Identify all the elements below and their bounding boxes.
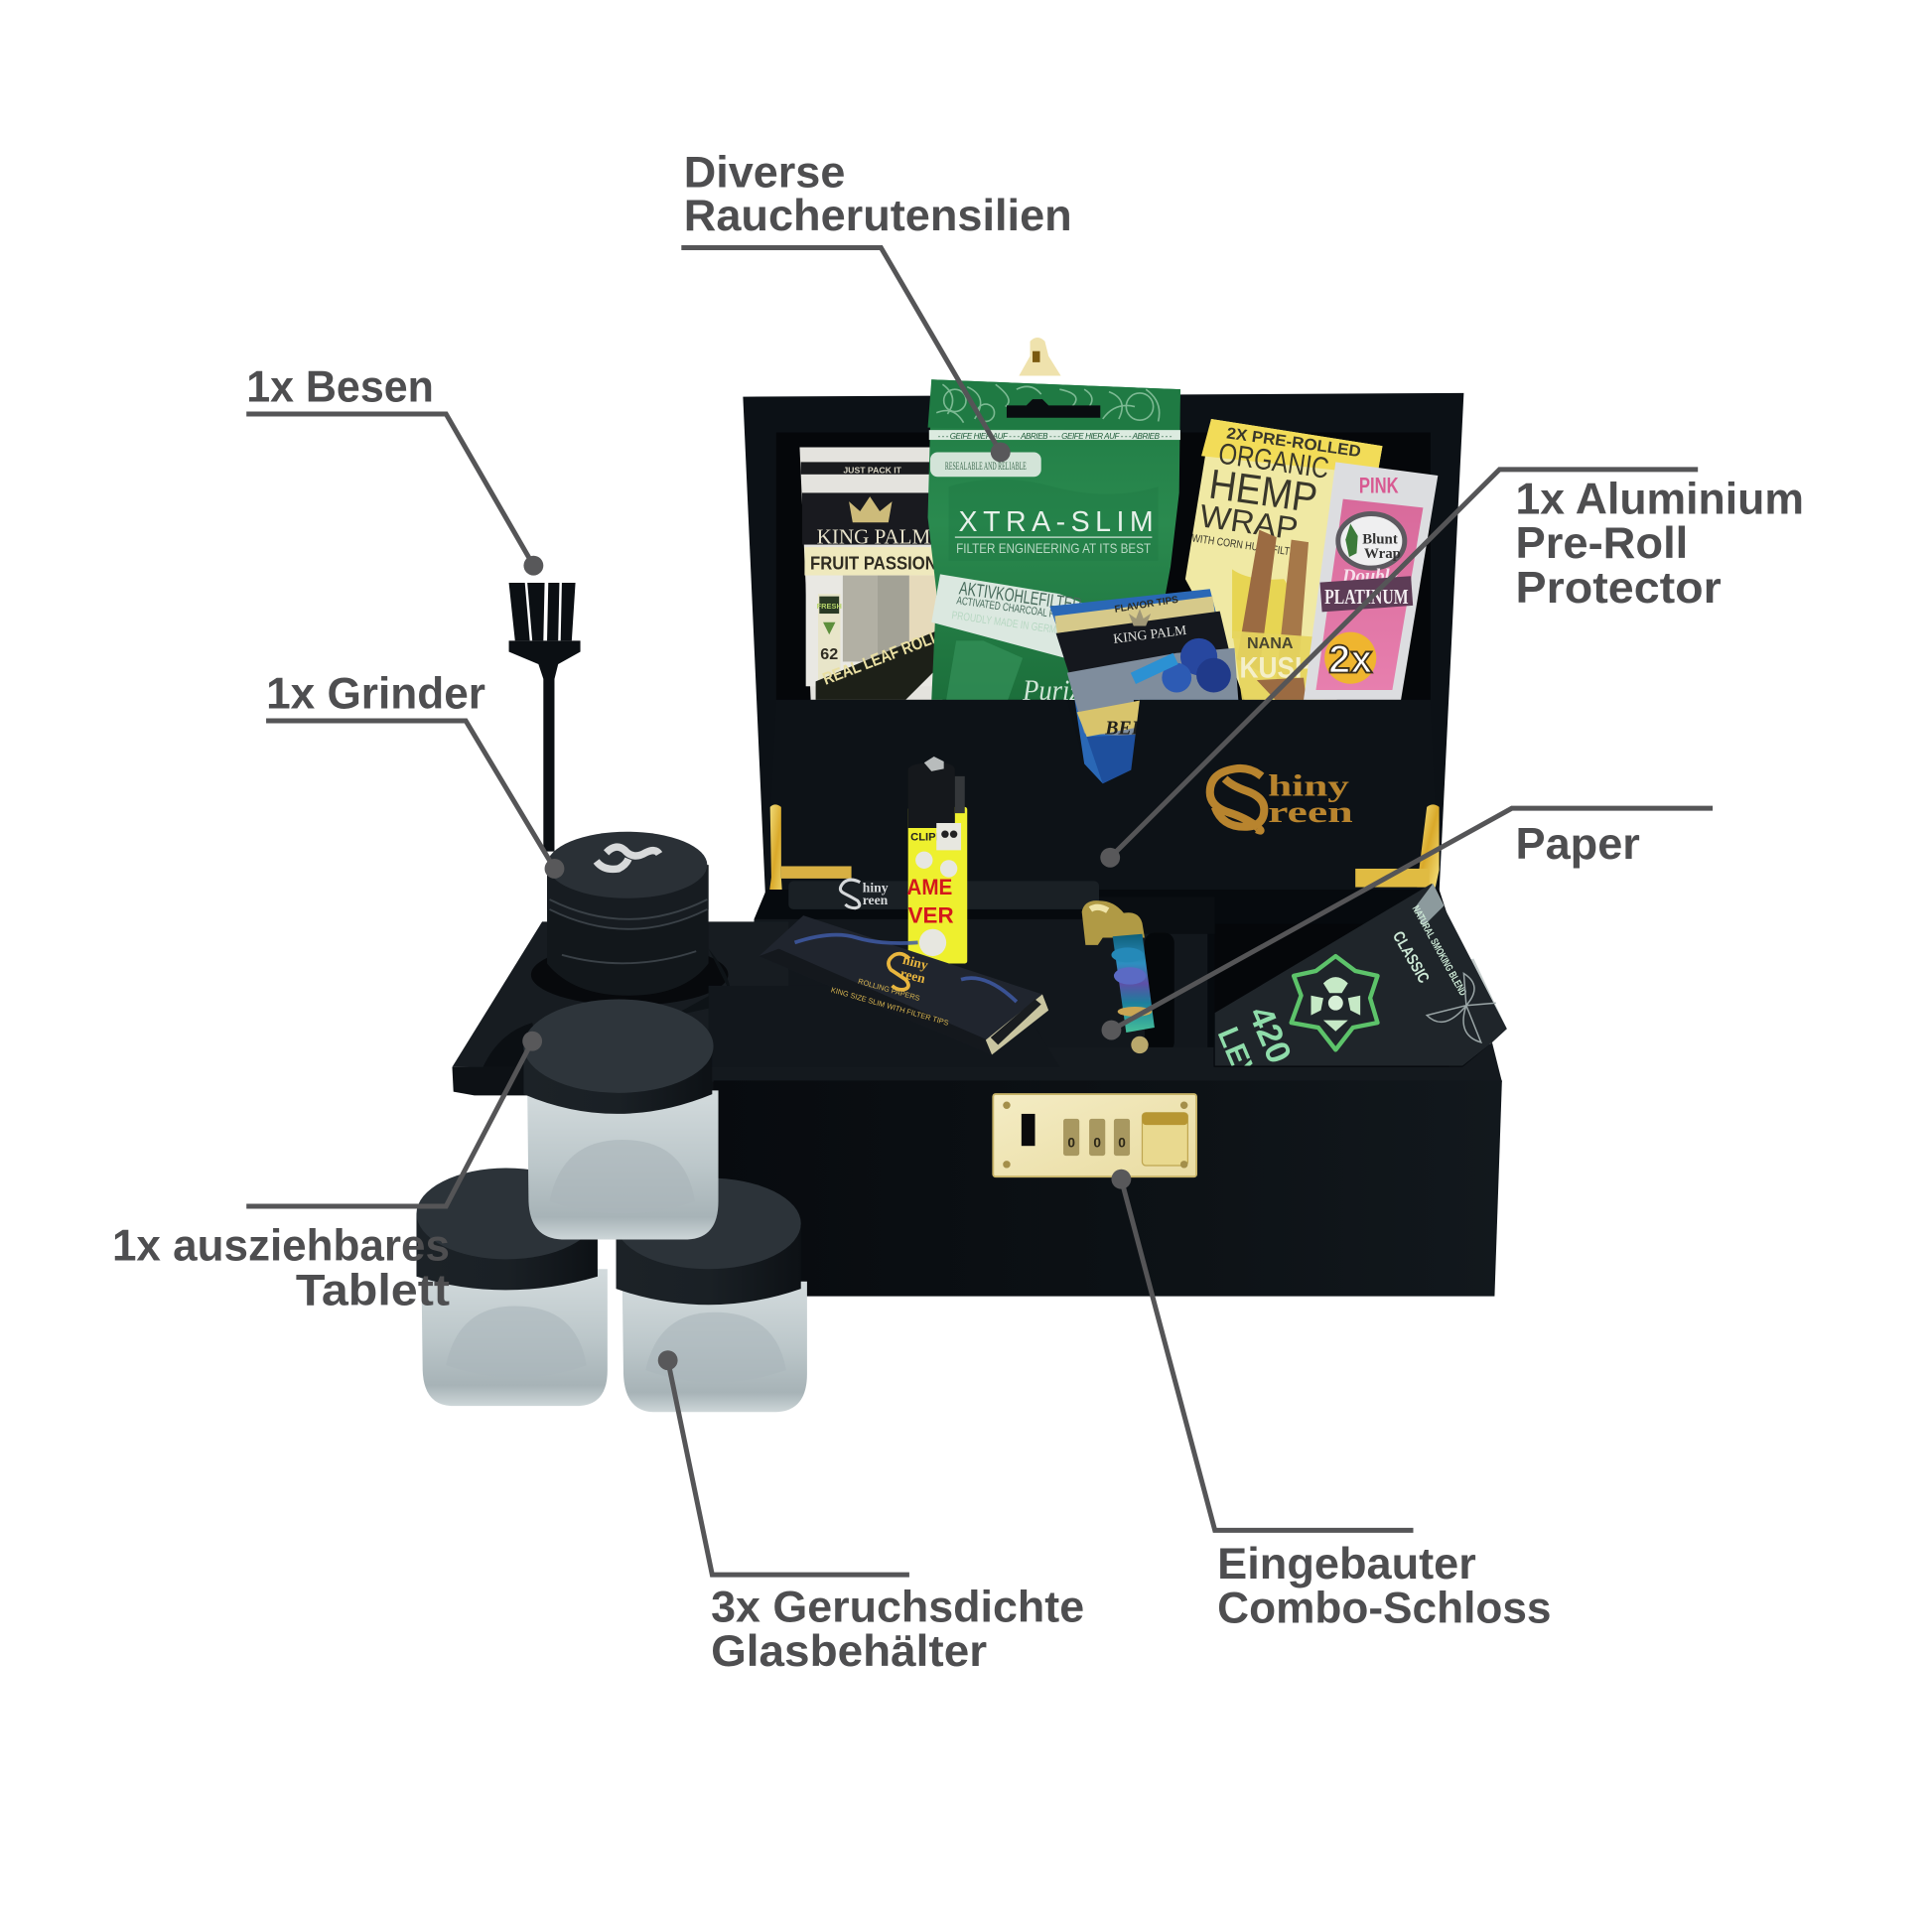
callout: 1x ausziehbares Tablett bbox=[112, 1032, 542, 1314]
logo: Shiny Green gold: hiny bbox=[1268, 768, 1350, 803]
icon: yellow Clipper lighter: AME bbox=[906, 875, 952, 899]
product: pink Blunt Wrap Double Platinum: 2x bbox=[1328, 638, 1372, 682]
icon: yellow Clipper lighter: VER bbox=[908, 903, 954, 928]
icon: jar lower left bbox=[416, 1169, 608, 1406]
product: yellow organic hemp wrap: WITH CORN HUSK FILTER bbox=[1191, 532, 1303, 560]
icon: jar top bbox=[523, 1000, 719, 1240]
product: green Xtra-Slim filter pouch: - - - GEIFE HIER AUF - - - ABRIEB - - - GEIFE HIER AUF - - - ABRIEB - - - bbox=[937, 432, 1173, 441]
callout: 1x Grinder: 1x Grinder bbox=[266, 670, 485, 719]
product: green Xtra-Slim filter pouch: RESEALABLE AND RELIABLE bbox=[945, 461, 1027, 473]
product: pink Blunt Wrap Double Platinum: PINK bbox=[1359, 473, 1399, 497]
product: green Xtra-Slim filter pouch: ACTIVATED CHARCOAL FILTER bbox=[956, 595, 1077, 623]
callout: 1x Aluminium Pre-Roll Protector bbox=[1100, 470, 1804, 868]
product: King Palm flavor tips berry pack: BER bbox=[1104, 718, 1145, 740]
callout: 1x Aluminium Pre-Roll Protector: 1x Aluminium bbox=[1516, 476, 1804, 524]
icon: combination lock: 0 bbox=[1067, 1135, 1075, 1150]
icon: black grinder bbox=[547, 832, 709, 996]
product: King Palm flavor tips berry pack: KING PALM bbox=[1112, 622, 1187, 646]
icon: 420 Level cone pack: 420 bbox=[1241, 1001, 1298, 1069]
product: pink Blunt Wrap Double Platinum: Double bbox=[1341, 566, 1398, 587]
icon: combination lock: 0 bbox=[1093, 1135, 1101, 1150]
product: green Xtra-Slim filter pouch: AKTIVKOHLEFILTER bbox=[958, 577, 1083, 615]
callout: Paper: Paper bbox=[1516, 820, 1640, 869]
product: green Xtra-Slim filter pouch: XTRA-SLIM bbox=[959, 506, 1154, 538]
icon: rolling papers pack: reen bbox=[898, 966, 927, 986]
icon: 420 Level cone pack: CLASSIC bbox=[1389, 928, 1433, 987]
icon: gold top clasp bbox=[1019, 338, 1061, 376]
panel: lid front flap over pockets bbox=[766, 700, 1440, 890]
panel: pull-out tray bbox=[452, 921, 788, 1095]
logo: Shiny Green gold: reen bbox=[1268, 794, 1353, 829]
icon: yellow Clipper lighter: CLIPPER bbox=[910, 831, 959, 843]
icon: rolling papers pack: ROLLING PAPERS bbox=[857, 977, 921, 1003]
icon: combination lock: 0 bbox=[1118, 1135, 1126, 1150]
icon: rolling papers pack: hiny bbox=[901, 952, 930, 973]
icon: yellow Clipper lighter bbox=[906, 757, 967, 964]
product: King Palm Fruit Passion pack: KING PALM bbox=[817, 524, 930, 548]
icon: 420 Level cone pack: NATURAL SMOKING BLEND bbox=[1410, 903, 1469, 998]
product: yellow organic hemp wrap: KUSH bbox=[1240, 652, 1313, 685]
panel: box interior bbox=[755, 890, 1502, 1082]
product: yellow organic hemp wrap: NANA bbox=[1247, 634, 1294, 652]
product: King Palm Fruit Passion pack: FRESH bbox=[817, 602, 842, 611]
product: King Palm Fruit Passion pack: 62 bbox=[820, 645, 838, 663]
icon: 420 Level cone pack bbox=[1215, 884, 1507, 1066]
product: pink Blunt Wrap Double Platinum: PLATINUM bbox=[1324, 585, 1409, 609]
product: King Palm Fruit Passion pack: REAL LEAF ROLL bbox=[820, 626, 942, 689]
product: pink Blunt Wrap Double Platinum: Blunt bbox=[1362, 531, 1398, 547]
product: King Palm flavor tips berry pack: FLAVOR TIPS bbox=[1114, 595, 1179, 616]
logo: Shiny Green gold bbox=[1210, 768, 1353, 831]
icon: rolling papers pack: KING SIZE SLIM WITH FILTER TIPS bbox=[830, 985, 950, 1028]
product: yellow organic hemp wrap: ORGANIC bbox=[1216, 438, 1331, 485]
product: green Xtra-Slim filter pouch: Purize bbox=[1022, 674, 1092, 707]
callout: Eingebauter Combo-Schloss: Combo-Schloss bbox=[1217, 1584, 1552, 1632]
callout: 1x Grinder bbox=[266, 670, 564, 879]
callout: 3x Geruchsdichte Glasbehälter bbox=[658, 1350, 1084, 1676]
product: pink Blunt Wrap Double Platinum bbox=[1304, 462, 1438, 700]
product: King Palm Fruit Passion pack bbox=[799, 448, 942, 700]
callout: Diverse Raucherutensilien: Diverse bbox=[684, 149, 845, 198]
product: green Xtra-Slim filter pouch: FILTER ENGINEERING AT ITS BEST bbox=[956, 541, 1152, 556]
callout: 1x Aluminium Pre-Roll Protector: Protector bbox=[1516, 564, 1722, 613]
icon: 420 Level cone pack: LEV bbox=[1211, 1023, 1264, 1088]
panel: open box lid bbox=[743, 393, 1463, 918]
loose tray floor patch bbox=[709, 986, 1059, 1067]
pre-roll protector tube: reen bbox=[863, 893, 889, 907]
pre-roll protector tube bbox=[788, 880, 1099, 909]
callout: 1x ausziehbares Tablett: Tablett bbox=[296, 1266, 450, 1314]
callout: Diverse Raucherutensilien: Raucherutensilien bbox=[684, 192, 1072, 240]
product: green Xtra-Slim filter pouch: PROUDLY MADE IN GERMANY bbox=[951, 610, 1075, 638]
product: King Palm flavor tips berry pack bbox=[1049, 589, 1238, 783]
product: yellow organic hemp wrap bbox=[1185, 419, 1382, 700]
callout: Eingebauter Combo-Schloss bbox=[1111, 1170, 1552, 1632]
icon: combination lock bbox=[993, 1094, 1196, 1176]
icon: gold hinge right bbox=[1355, 804, 1440, 888]
callout: 1x Aluminium Pre-Roll Protector: Pre-Roll bbox=[1516, 519, 1688, 568]
pre-roll protector tube: hiny bbox=[863, 881, 889, 896]
product: King Palm Fruit Passion pack: JUST PACK IT bbox=[843, 466, 902, 476]
product: yellow organic hemp wrap: WRAP bbox=[1197, 497, 1301, 547]
icon: rolling papers pack bbox=[759, 915, 1048, 1054]
callout: 1x Besen: 1x Besen bbox=[246, 363, 434, 412]
callout: 3x Geruchsdichte Glasbehälter: Glasbehälter bbox=[711, 1627, 987, 1676]
callout: Paper bbox=[1102, 808, 1713, 1039]
product: King Palm Fruit Passion pack: FRUIT PASSION bbox=[810, 552, 937, 573]
callout: 1x ausziehbares Tablett: 1x ausziehbares bbox=[112, 1222, 450, 1271]
product: yellow organic hemp wrap: HEMP bbox=[1206, 461, 1320, 521]
icon: brush (Besen) bbox=[509, 583, 581, 852]
callout: Diverse Raucherutensilien bbox=[681, 149, 1072, 462]
product: pink Blunt Wrap Double Platinum: Wrap bbox=[1364, 546, 1401, 562]
panel: box base front with rim bbox=[690, 1042, 1502, 1297]
callout: 3x Geruchsdichte Glasbehälter: 3x Geruchsdichte bbox=[711, 1583, 1084, 1631]
product: green Xtra-Slim filter pouch bbox=[928, 379, 1180, 707]
callout: Eingebauter Combo-Schloss: Eingebauter bbox=[1217, 1540, 1476, 1588]
callout: 1x Besen bbox=[246, 363, 543, 576]
product: yellow organic hemp wrap: 2X PRE-ROLLED bbox=[1225, 424, 1362, 461]
icon: jar lower right bbox=[617, 1177, 807, 1412]
icon: gold hinge left bbox=[766, 804, 852, 914]
icon: rainbow metal pipe bbox=[1082, 900, 1155, 1053]
